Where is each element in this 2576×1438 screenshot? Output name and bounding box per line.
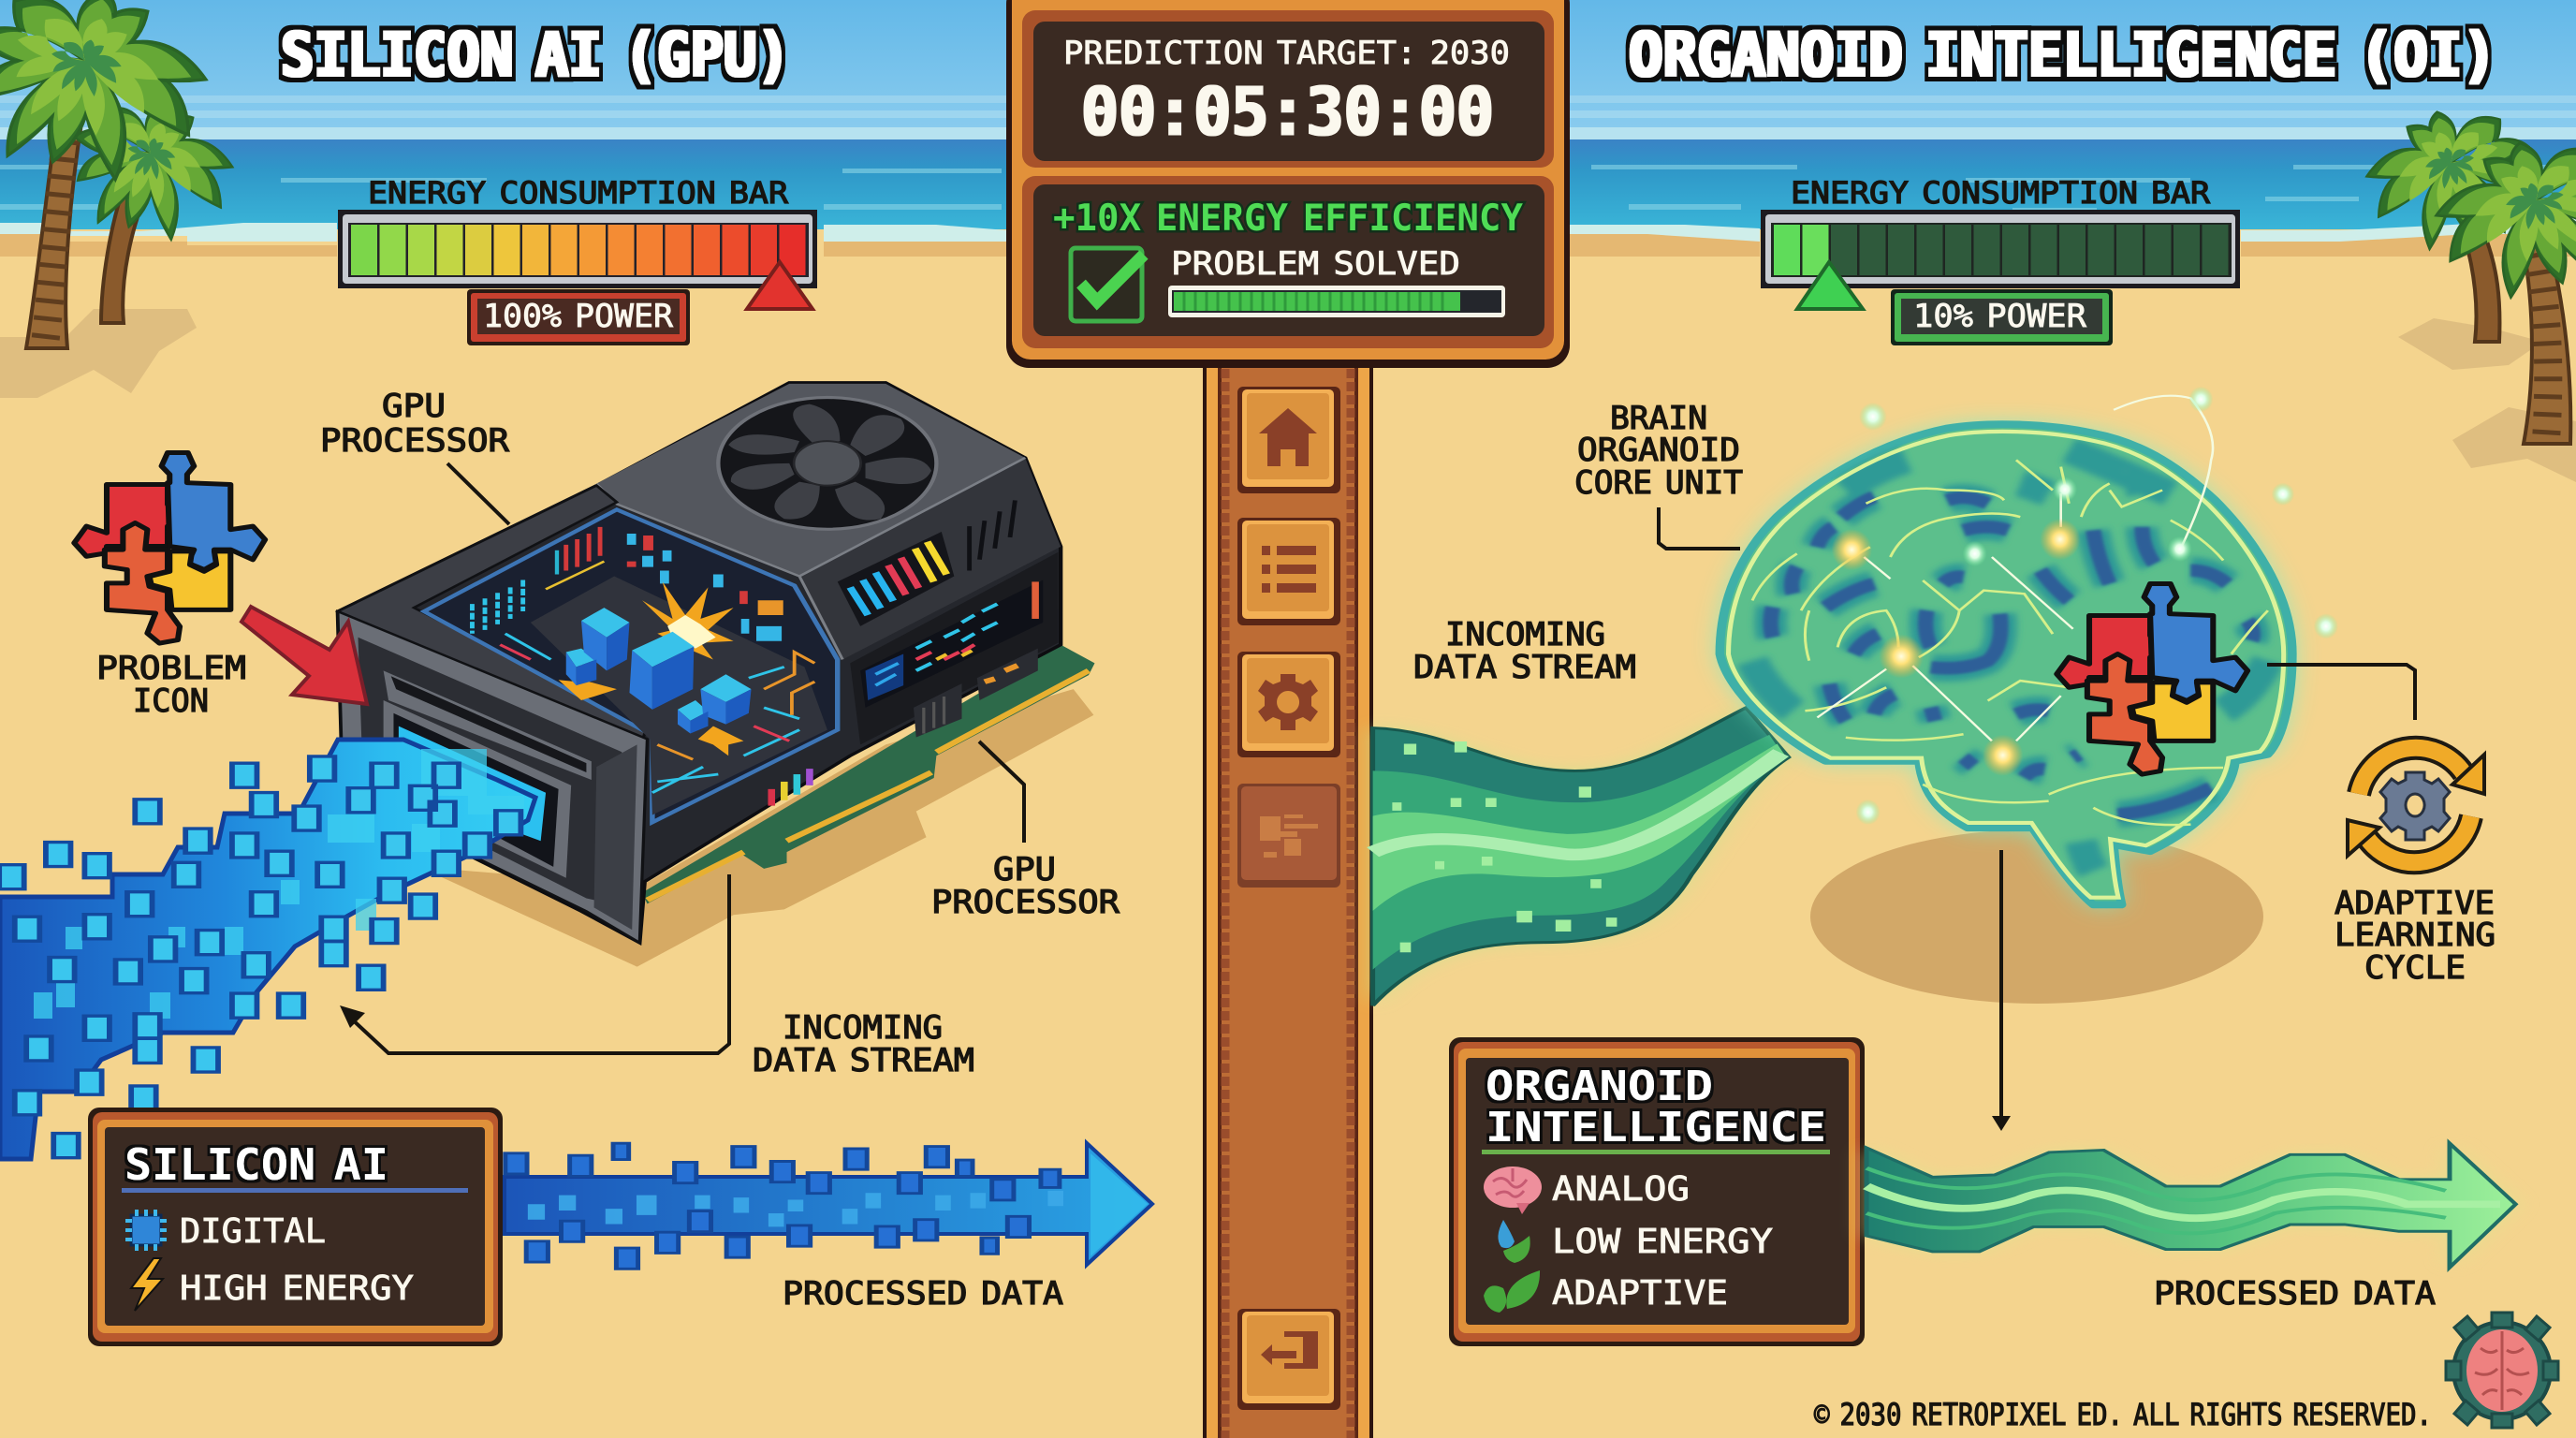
icon: leaf — [1484, 1270, 1540, 1313]
panel: silicon AI legend: SILICON AI — [124, 1139, 388, 1190]
data stream: silicon input — [0, 740, 535, 1159]
title: Silicon AI: SILICON AI (GPU) — [281, 21, 790, 91]
label: incoming data stream — [753, 1009, 974, 1079]
GPU window — [338, 486, 838, 822]
panel: organoid intelligence legend: ANALOG — [1552, 1170, 1690, 1209]
label: 10% power — [1891, 289, 2113, 345]
fan — [718, 398, 936, 529]
panel: navigation column — [1203, 356, 1373, 1438]
glowing blue cubes — [566, 608, 752, 734]
label: problem icon — [96, 650, 246, 720]
icon: left palm trees — [0, 0, 232, 348]
panel: organoid intelligence legend: INTELLIGENCE — [1486, 1104, 1826, 1152]
gyri lines — [1752, 460, 2268, 825]
label: GPU processor upper: PROCESSOR — [320, 422, 510, 460]
neural links — [1817, 396, 2213, 741]
panel: silicon AI legend: HIGH ENERGY — [180, 1269, 414, 1308]
label: processed data organoid: PROCESSED DATA — [2154, 1275, 2436, 1313]
GPU circuit board — [642, 645, 1095, 903]
label: adaptive learning cycle: ADAPTIVE — [2334, 885, 2495, 922]
rgb strip — [838, 532, 954, 626]
display: timer: 00:05:30:00 — [1081, 73, 1494, 151]
panel: organoid intelligence legend: ORGANOID — [1486, 1063, 1713, 1110]
brain glow — [1720, 424, 2292, 904]
icon: chip — [1260, 814, 1318, 858]
button: exit — [1237, 1309, 1340, 1410]
arrow: organoid processed data — [1866, 1143, 2516, 1268]
label: incoming data stream organoid — [1413, 616, 1636, 686]
label: problem icon: ICON — [133, 682, 209, 720]
heading: energy bar: ENERGY CONSUMPTION BAR — [368, 175, 789, 211]
panel: organoid intelligence legend — [1449, 1037, 1865, 1346]
button: home — [1237, 387, 1340, 493]
display: timer: PREDICTION TARGET: 2030 — [1063, 35, 1510, 72]
label: incoming data stream: INCOMING — [783, 1009, 943, 1047]
copyright: © 2030 RETROPIXEL ED. ALL RIGHTS RESERVED. — [1814, 1397, 2432, 1432]
icon: check box — [1071, 248, 1144, 321]
illustration: glowing brain organoid — [1720, 387, 2338, 904]
illustration: GPU — [338, 383, 1095, 967]
button: disabled chip — [1237, 784, 1340, 888]
panel: organoid intelligence legend: ADAPTIVE — [1552, 1274, 1728, 1313]
GPU front port — [338, 611, 647, 943]
glowing nodes — [1832, 387, 2338, 825]
icon: water and leaf — [1498, 1220, 1530, 1263]
LED row — [765, 789, 778, 806]
label: incoming data stream organoid: INCOMING — [1445, 616, 1605, 653]
leader: brain label — [1659, 507, 1740, 549]
marker triangle — [747, 262, 812, 309]
marker triangle — [1797, 262, 1863, 309]
energy meter: silicon — [338, 175, 817, 345]
display: efficiency: +10X ENERGY EFFICIENCY — [1053, 198, 1524, 240]
panel: silicon AI legend — [88, 1108, 503, 1346]
data fragments — [0, 756, 520, 1158]
arrow: brain to processed stream — [1992, 850, 2011, 1131]
GPU fan shroud — [596, 384, 1061, 744]
icon: gear brain logo — [2446, 1313, 2558, 1428]
button: list — [1237, 518, 1340, 625]
arrow: silicon processed data — [505, 1143, 1152, 1269]
title: Organoid Intelligence: ORGANOID INTELLIGENCE (OI) — [1629, 21, 2496, 91]
shadow under brain — [1810, 829, 2263, 1004]
label: brain organoid core unit: BRAIN — [1610, 400, 1707, 437]
label: adaptive learning cycle — [2334, 885, 2496, 987]
icon: lightning — [131, 1258, 163, 1311]
brain inner rim — [1729, 432, 2284, 898]
GPU body — [338, 383, 1061, 943]
label: 10% power: 10% POWER — [1913, 298, 2087, 335]
icon: exit — [1261, 1331, 1318, 1369]
energy meter: organoid — [1761, 175, 2240, 345]
bar segments — [1774, 225, 2228, 275]
panel: prediction countdown — [1006, 0, 1570, 368]
label: GPU processor upper: GPU — [382, 388, 446, 425]
icon: gear — [1258, 674, 1318, 730]
icon: right palm trees — [2366, 112, 2576, 444]
label: GPU processor lower: GPU — [993, 851, 1056, 888]
display: timer — [1033, 22, 1544, 161]
button: settings — [1237, 652, 1340, 757]
icon: pink brain — [1484, 1167, 1542, 1214]
arrow: problem into GPU — [242, 607, 367, 704]
bar segments — [351, 225, 805, 275]
label: adaptive learning cycle: CYCLE — [2364, 949, 2466, 987]
label: GPU processor lower — [931, 851, 1120, 921]
label: problem icon: PROBLEM — [96, 650, 246, 687]
label: incoming data stream: DATA STREAM — [753, 1042, 974, 1079]
shadows under palms — [0, 309, 2576, 482]
label: processed data silicon: PROCESSED DATA — [783, 1275, 1063, 1313]
panel: organoid intelligence legend: LOW ENERGY — [1552, 1223, 1773, 1261]
label: GPU processor lower: PROCESSOR — [931, 884, 1120, 921]
puzzle inside brain — [2056, 584, 2247, 774]
data stream: organoid input — [1373, 708, 1789, 1005]
label: brain organoid core unit — [1574, 400, 1743, 502]
label: incoming data stream organoid: DATA STREAM — [1413, 649, 1636, 686]
brain body — [1720, 424, 2292, 904]
leader: lower GPU label — [979, 741, 1024, 843]
icon: chip — [125, 1210, 167, 1251]
label: brain organoid core unit: CORE UNIT — [1574, 464, 1743, 502]
leader arrow: incoming data stream — [340, 874, 729, 1053]
heading: energy bar: ENERGY CONSUMPTION BAR — [1791, 175, 2211, 211]
icon: puzzle problem — [74, 453, 265, 643]
explosions — [642, 581, 734, 659]
display: efficiency — [1033, 184, 1544, 336]
icon: adaptive learning cycle — [2348, 748, 2484, 862]
icon: list — [1262, 546, 1316, 593]
leader: puzzle to learning cycle — [2267, 665, 2415, 720]
leader: upper GPU label — [447, 463, 509, 524]
wall lights — [472, 527, 814, 793]
GPU side panel — [860, 580, 1043, 737]
sulci — [1752, 450, 2268, 872]
icon: home — [1259, 408, 1317, 466]
GPU ground shadow — [419, 689, 1093, 967]
label: brain organoid core unit: ORGANOID — [1577, 432, 1740, 469]
label: 100% power: 100% POWER — [483, 298, 674, 335]
display: efficiency: PROBLEM SOLVED — [1171, 245, 1460, 283]
label: GPU processor upper — [320, 388, 510, 460]
label: 100% power — [467, 289, 690, 345]
progress bar — [1168, 286, 1505, 317]
label: adaptive learning cycle: LEARNING — [2334, 917, 2496, 954]
panel: silicon AI legend: DIGITAL — [180, 1212, 326, 1251]
